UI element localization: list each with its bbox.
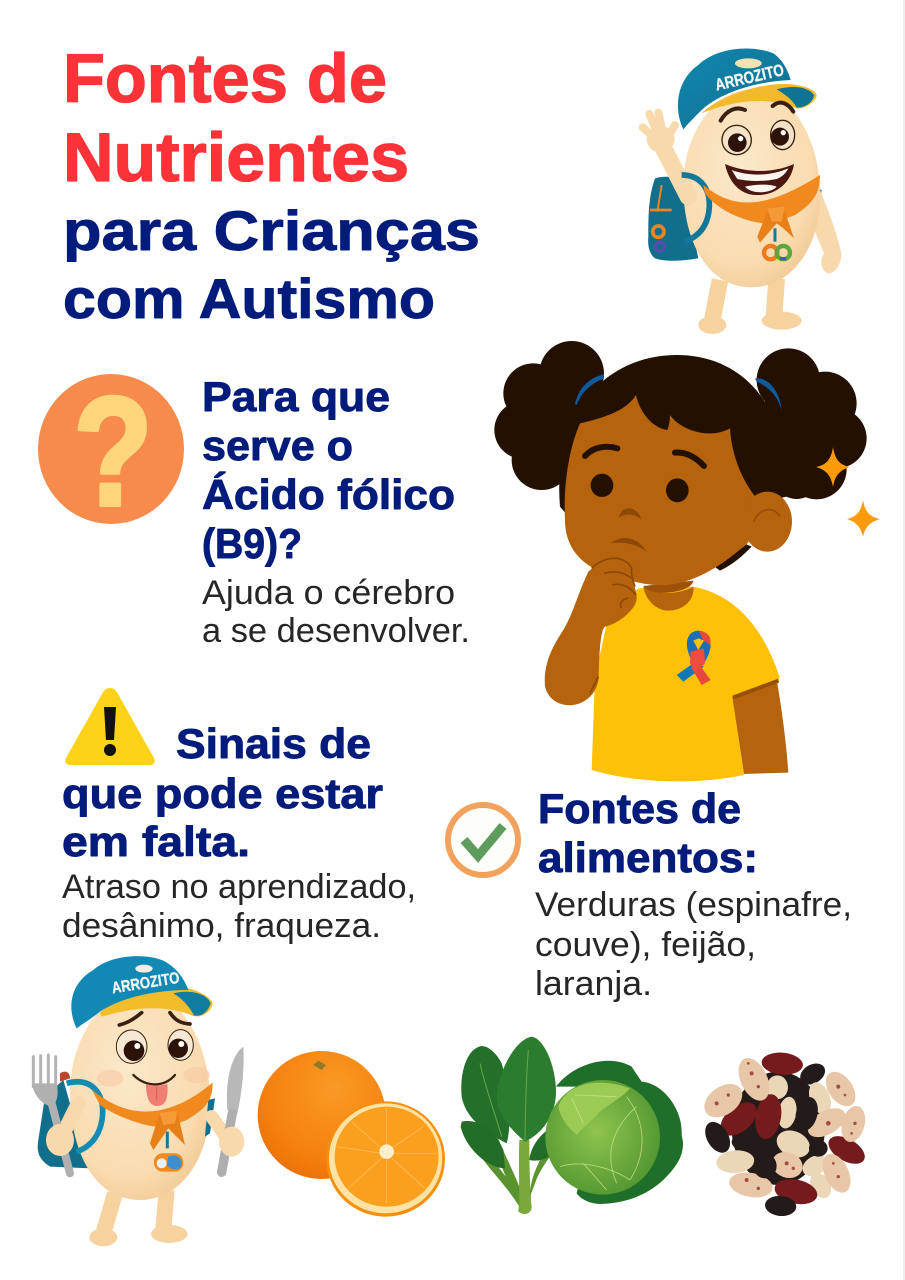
text: answer: Ajuda o cérebro: [202, 574, 455, 612]
text: foods: laranja.: [535, 965, 652, 1003]
food: beans: [698, 1051, 869, 1217]
icon: warning triangle: [65, 688, 155, 765]
mascot: hungry Arrozito with cutlery: ARROZITO: [111, 970, 181, 997]
title: com Autismo: [63, 267, 435, 330]
food: spinach: [461, 1037, 565, 1214]
title: Nutrientes: [63, 119, 409, 196]
icon: fork: [32, 1055, 70, 1173]
mascot: hungry Arrozito with cutlery: [32, 956, 244, 1246]
title: [63, 40, 480, 330]
heading: Para que serve: Ácido fólico: [202, 471, 455, 518]
text: answer: [202, 574, 470, 650]
heading: Para que serve: serve o: [202, 422, 353, 469]
icon: sparkle: [847, 500, 880, 537]
food: cabbage: [545, 1061, 683, 1204]
heading: Para que serve: (B9)?: [202, 520, 302, 567]
title: Fontes de: [63, 40, 387, 117]
heading: Fontes de alimentos: alimentos:: [538, 834, 758, 881]
text: signs: desânimo, fraqueza.: [62, 907, 381, 945]
text: foods: couve), feijão,: [535, 926, 756, 964]
heading: Fontes de alimentos: [538, 785, 758, 881]
icon: question mark: [38, 365, 184, 539]
mascot: waving Arrozito: ARROZITO: [713, 60, 786, 95]
heading: Sinais de falta: [62, 720, 383, 865]
heading: Para que serve: Para que: [202, 373, 390, 420]
heading: Fontes de alimentos: Fontes de: [538, 785, 741, 832]
illustration: thinking girl: [494, 341, 867, 781]
mascot: waving Arrozito: [643, 48, 841, 334]
heading: Sinais de falta: Sinais de: [176, 720, 371, 767]
icon: sparkle on hair: [816, 447, 850, 487]
text: foods: Verduras (espinafre,: [535, 886, 852, 924]
heading: Para que serve: [202, 373, 455, 567]
icon: question mark: ?: [73, 365, 153, 539]
text: foods: [535, 886, 852, 1003]
text: signs: [62, 868, 416, 945]
text: signs: Atraso no aprendizado,: [62, 868, 416, 906]
title: para Crianças: [63, 199, 480, 262]
icon: check mark: [448, 805, 518, 875]
icon: knife: [222, 1047, 244, 1172]
heading: Sinais de falta: em falta.: [62, 818, 250, 865]
text: answer: a se desenvolver.: [202, 612, 470, 650]
icon: awareness ribbon: [677, 631, 711, 685]
food: orange: [258, 1051, 445, 1217]
hands: [46, 1124, 244, 1157]
heading: Sinais de falta: que pode estar: [62, 770, 383, 817]
